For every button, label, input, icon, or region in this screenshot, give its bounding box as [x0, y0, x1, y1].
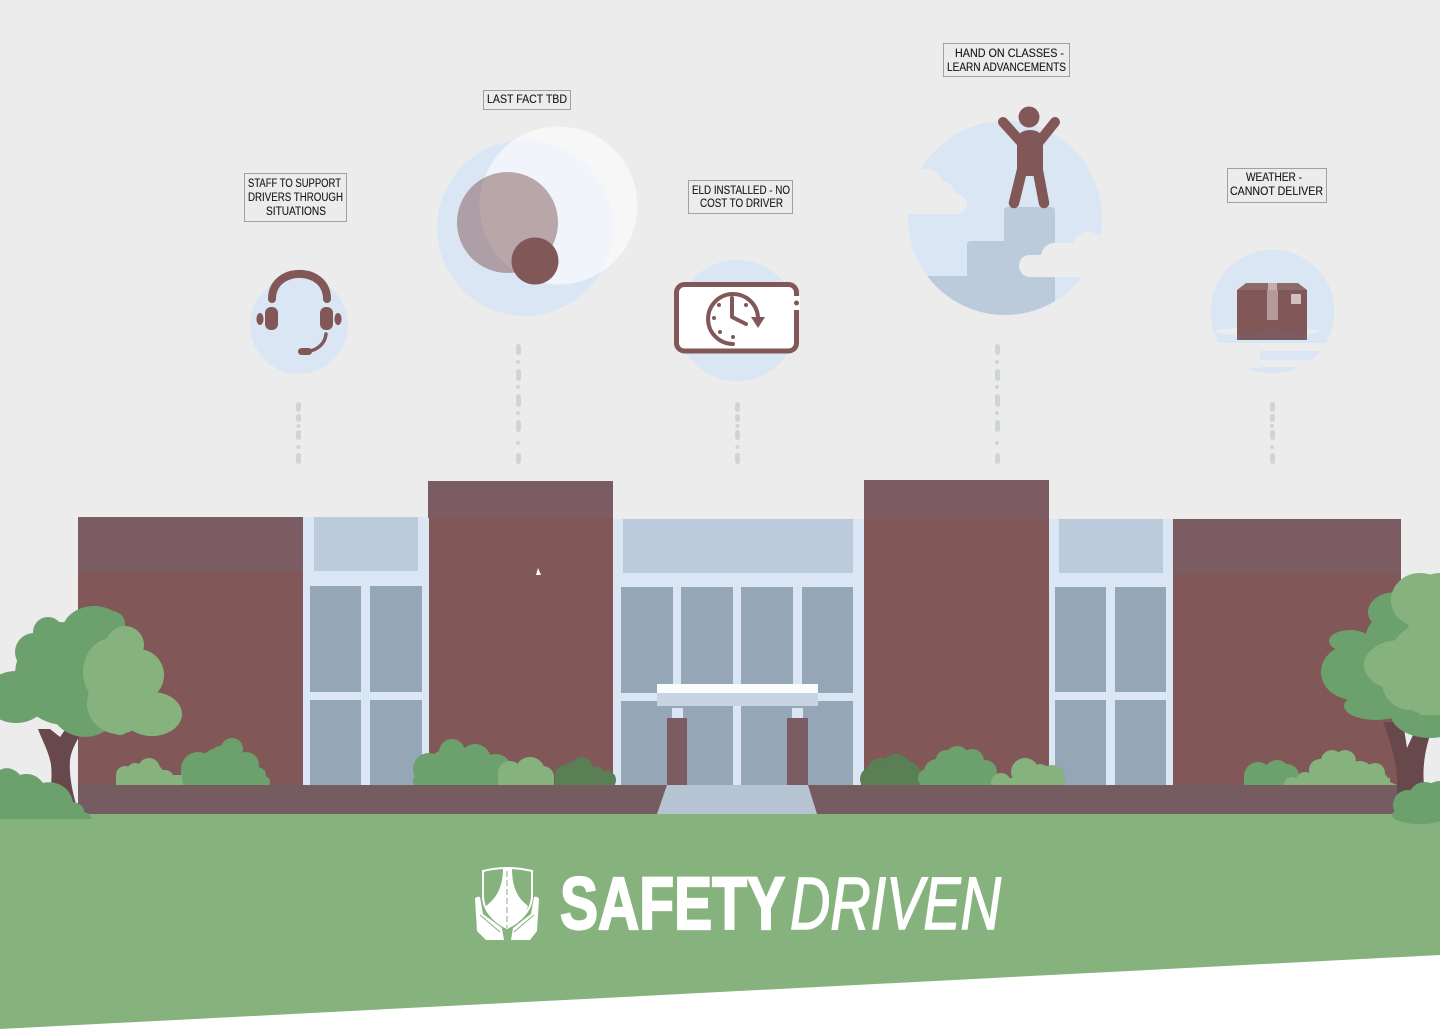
- front bush: [0, 768, 92, 819]
- callout: hands-on label: [944, 44, 1070, 76]
- connector: ELD: [735, 402, 740, 464]
- dark canopy: [0, 606, 130, 737]
- icon: package: [1205, 250, 1340, 374]
- icon: headset: [250, 274, 348, 374]
- callout: hands-on label: HAND ON CLASSES -: [955, 48, 1064, 60]
- icon: clock on screen: [676, 260, 800, 381]
- entrance steps: [657, 785, 817, 814]
- left glass section: [303, 517, 429, 785]
- tree: left: [0, 606, 182, 819]
- icon: person on stairs: [900, 106, 1105, 320]
- connector: staff: [296, 402, 301, 464]
- callout: ELD label: ELD INSTALLED - NO: [692, 185, 790, 197]
- callout: last fact label: LAST FACT TBD: [487, 94, 567, 106]
- callout: ELD label: COST TO DRIVER: [700, 198, 783, 210]
- right glass section: [1049, 519, 1174, 785]
- callout: hands-on label: LEARN ADVANCEMENTS: [947, 62, 1066, 74]
- entrance canopy: [657, 684, 818, 785]
- callout: staff label: [244, 174, 346, 222]
- building: [78, 480, 1401, 814]
- connector: hands-on: [995, 344, 1000, 464]
- left wing: [78, 517, 303, 785]
- trunk: [1383, 722, 1430, 805]
- dark canopy: [1321, 592, 1440, 738]
- right tower: [864, 480, 1049, 785]
- trunk: [38, 727, 84, 804]
- callout: weather label: CANNOT DELIVER: [1230, 186, 1323, 198]
- connector: weather: [1270, 402, 1275, 464]
- foundation: [78, 785, 1397, 814]
- right wing: [1173, 519, 1401, 785]
- callout: staff label: STAFF TO SUPPORT: [248, 178, 341, 190]
- left tower: [428, 481, 613, 785]
- tree: right: [1321, 573, 1440, 824]
- wordmark: SAFETY: [560, 862, 785, 945]
- logo: [475, 862, 1001, 945]
- icon: overlapping circles: [437, 126, 638, 316]
- light canopy: [83, 626, 182, 736]
- logo: DRIVEN: [790, 862, 1001, 945]
- callout: staff label: SITUATIONS: [266, 206, 326, 218]
- connector: last fact: [516, 344, 521, 464]
- logo mark: shield and hands: [475, 868, 539, 940]
- callout: weather label: [1228, 168, 1326, 202]
- callout: ELD label: [688, 180, 792, 214]
- light canopy: [1364, 573, 1440, 715]
- central glass section: [613, 519, 864, 785]
- ground: [0, 814, 1440, 1029]
- bushes along building: [116, 738, 1397, 785]
- callout: staff label: DRIVERS THROUGH: [248, 192, 343, 204]
- callout: weather label: WEATHER -: [1246, 172, 1302, 184]
- front bush: [1392, 781, 1440, 824]
- callout: last fact label: [484, 90, 570, 110]
